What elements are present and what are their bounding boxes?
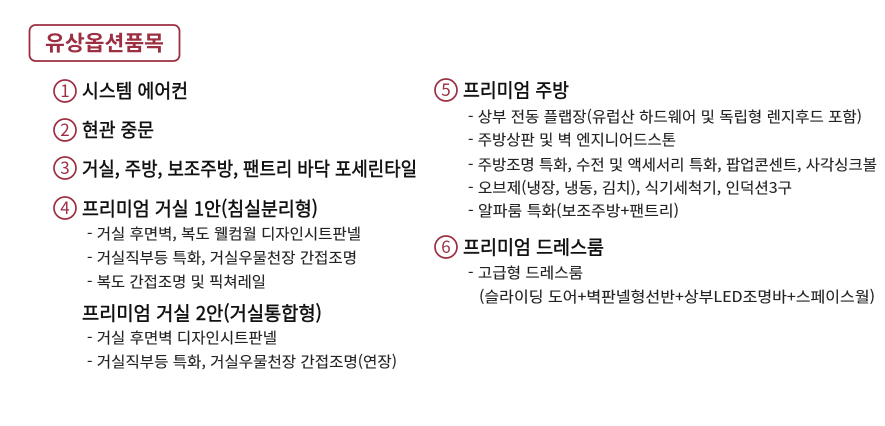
item 3: 3: [60, 154, 70, 179]
item 2: 2: [60, 116, 70, 141]
item 4 plan 1 details: - 거실직부등 특화, 거실우물천장 간접조명: [87, 247, 357, 268]
item 4 plan 1 details: - 거실 후면벽, 복도 웰컴월 디자인시트판넬: [87, 223, 361, 244]
item 5 details: - 상부 전동 플랩장(유럽산 하드웨어 및 독립형 렌지후드 포함): [468, 106, 862, 127]
item 6 details: (슬라이딩 도어+벽판넬형선반+상부LED조명바+스페이스월): [479, 286, 875, 307]
title badge: [30, 25, 180, 61]
item 6: 6: [441, 233, 451, 258]
item 5: 프리미엄 주방: [463, 76, 569, 103]
item 5 details: - 주방조명 특화, 수전 및 액세서리 특화, 팝업콘센트, 사각싱크볼: [468, 154, 877, 175]
item 4 plan 2 heading: 프리미엄 거실 2안(거실통합형): [82, 299, 322, 326]
item 4: 프리미엄 거실 1안(침실분리형): [82, 194, 318, 222]
item 4: 4: [60, 194, 70, 219]
item 5: 5: [441, 76, 451, 101]
item 3: 거실, 주방, 보조주방, 팬트리 바닥 포세린타일: [82, 154, 417, 182]
item 4 plan 1 details: - 복도 간접조명 및 픽쳐레일: [87, 271, 266, 292]
item 4 plan 2 details: - 거실직부등 특화, 거실우물천장 간접조명(연장): [87, 351, 397, 372]
item 5 details: - 주방상판 및 벽 엔지니어드스톤: [468, 129, 676, 150]
item 1: 1: [60, 77, 70, 102]
item 1: 시스템 에어컨: [82, 76, 188, 104]
item 5 details: [468, 106, 877, 221]
title badge: 유상옵션품목: [45, 28, 164, 58]
item 5: [435, 76, 877, 221]
item 6: [435, 233, 875, 307]
item 4 plan 2 details: - 거실 후면벽 디자인시트판넬: [87, 327, 277, 348]
item 6 details: - 고급형 드레스룸: [468, 262, 583, 283]
item 6: 프리미엄 드레스룸: [463, 233, 604, 260]
item 4: [54, 194, 397, 372]
item 2: 현관 중문: [82, 116, 154, 142]
item 4 plan 2 details: [87, 327, 397, 372]
item 6 details: [468, 262, 875, 307]
item 2: [54, 116, 154, 142]
item 4 plan 1 details: [87, 223, 361, 292]
item 5 details: - 오브제(냉장, 냉동, 김치), 식기세척기, 인덕션3구: [468, 177, 792, 198]
item 5 details: - 알파룸 특화(보조주방+팬트리): [468, 200, 679, 221]
